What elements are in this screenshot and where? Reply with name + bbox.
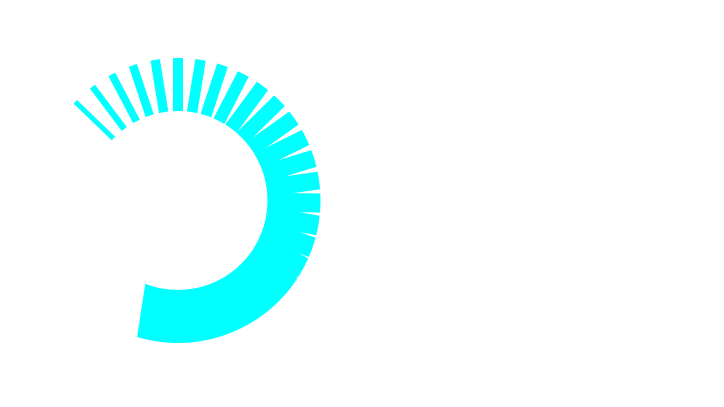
- radial spiral gauge: [74, 58, 320, 343]
